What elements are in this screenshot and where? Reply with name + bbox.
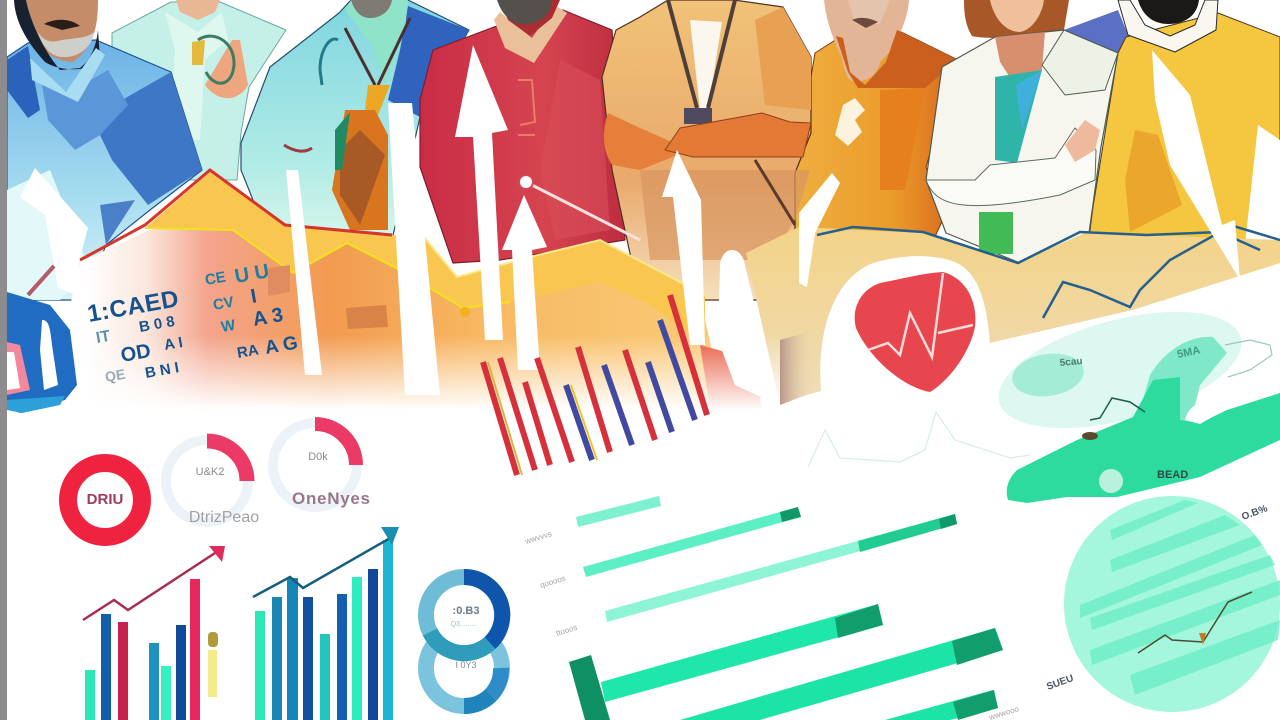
text block: blurred data table: A 3 bbox=[251, 304, 285, 331]
text block: blurred data table: CV bbox=[212, 294, 235, 314]
donut charts: stacked blue pair: Q3......... bbox=[451, 621, 477, 628]
text block: blurred data table: 1:CAED bbox=[85, 285, 181, 328]
bar chart: red and navy slanted bars bbox=[483, 295, 707, 475]
text block: blurred data table bbox=[85, 260, 299, 385]
bar chart: slanted mint bars bbox=[523, 496, 1020, 720]
map: mint green continents: 5MA bbox=[1176, 344, 1201, 361]
map: mint green continents: BEAD bbox=[1157, 469, 1188, 481]
donut charts: stacked blue pair bbox=[426, 577, 502, 706]
bar chart: right rising bars with teal arrow bbox=[253, 527, 399, 720]
node on trend arrow bbox=[526, 182, 640, 240]
white upward arrows bbox=[20, 45, 1240, 405]
donut chart: red: DRIU bbox=[87, 491, 123, 508]
bar chart: slanted mint bars: qoooos bbox=[539, 574, 567, 590]
bar 6 bbox=[885, 690, 998, 720]
donut chart: pink quarter left: U&K2 bbox=[196, 466, 224, 478]
figure: woman in white lab coat bbox=[926, 0, 1118, 263]
figure: man in red shirt bbox=[420, 0, 625, 263]
bar 5 bbox=[680, 628, 1003, 720]
donut charts: stacked blue pair: I 0Y3 bbox=[455, 660, 477, 670]
brown shadow beside heart bbox=[780, 330, 815, 405]
panel: tan lower background bbox=[746, 227, 1280, 405]
text block: blurred data table: B 0 8 bbox=[138, 313, 176, 336]
chart: mint circle with stripes bbox=[1045, 496, 1280, 712]
bar 4 bbox=[601, 604, 883, 702]
text block: blurred data table: A I bbox=[163, 334, 184, 354]
white band under tan panel bbox=[780, 263, 1280, 500]
donut chart: pink quarter right: OneNyes bbox=[292, 489, 370, 508]
bar chart: slanted mint bars: ttooos bbox=[555, 623, 578, 638]
donut chart: pink quarter left bbox=[166, 440, 259, 526]
line chart: faint heartbeat bbox=[808, 412, 1030, 467]
figure: man with crossed arms in tan shirt bbox=[602, 0, 811, 300]
text block: blurred data table: A G bbox=[263, 332, 299, 359]
donut chart: pink quarter left: DtrizPeao bbox=[189, 509, 259, 526]
figure: man in blue shirt bbox=[7, 0, 202, 300]
donut chart: pink quarter right: D0k bbox=[308, 451, 328, 463]
figure: man with stethoscope in teal coat bbox=[241, 0, 469, 240]
donut chart: pink quarter right bbox=[273, 423, 370, 508]
figure: man in light teal coat bbox=[112, 0, 286, 180]
chart: mint circle with stripes: SUEU bbox=[1045, 673, 1075, 693]
bar 1 bbox=[576, 496, 661, 527]
trend line bbox=[817, 225, 1280, 318]
text block: blurred data table: U U bbox=[233, 260, 271, 288]
bar 3 bbox=[605, 514, 957, 622]
map: mint green continents bbox=[986, 289, 1280, 503]
icon: red heart with heartbeat bbox=[820, 256, 990, 430]
chart: mint circle with stripes: O.B% bbox=[1240, 503, 1269, 523]
map: mint green continents: 5cau bbox=[1059, 356, 1083, 369]
icon: blue medical device bbox=[7, 266, 77, 413]
text block: blurred data table: CE bbox=[204, 269, 227, 289]
panel: house-shaped area chart bbox=[50, 170, 780, 439]
text block: blurred data table: I bbox=[249, 285, 258, 308]
bar chart: left rising bars with red arrow bbox=[83, 546, 225, 720]
text block: blurred data table: OD bbox=[119, 340, 152, 367]
house roof band bbox=[145, 172, 705, 345]
text block: blurred data table: RA bbox=[236, 341, 260, 362]
figure: man in orange shirt bbox=[795, 0, 958, 243]
figure: man in yellow shirt bbox=[1064, 0, 1280, 300]
panel: healthcare workers group portrait bbox=[7, 0, 1280, 300]
text block: blurred data table: IT bbox=[95, 328, 112, 347]
text block: blurred data table: QE bbox=[104, 366, 126, 385]
donut charts: stacked blue pair: :0.B3 bbox=[453, 605, 479, 617]
axis bar bbox=[569, 655, 610, 720]
text block: blurred data table: B N I bbox=[144, 359, 180, 382]
house wall bbox=[60, 217, 762, 430]
bar 2 bbox=[583, 507, 801, 577]
left edge strip bbox=[0, 0, 7, 720]
donut chart: red bbox=[68, 463, 142, 537]
text block: blurred data table: W bbox=[220, 317, 237, 336]
labels: wwvvvs bbox=[523, 529, 553, 546]
